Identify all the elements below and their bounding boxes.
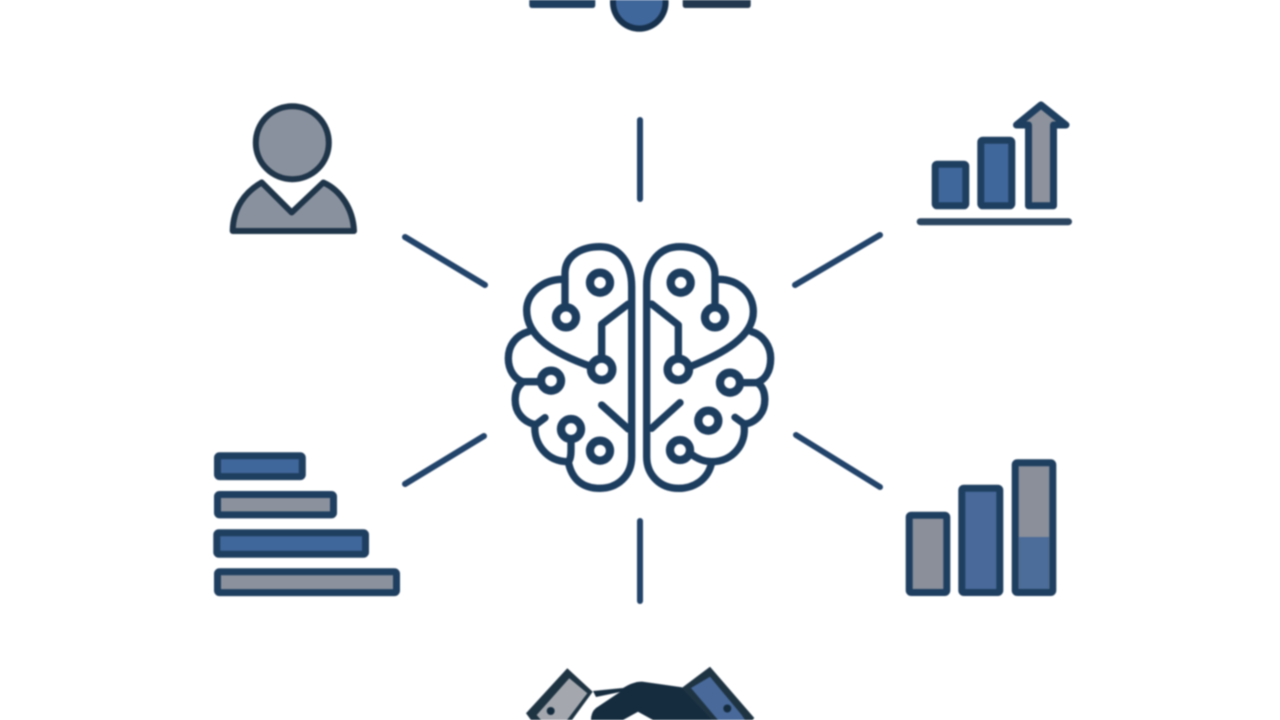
icon: person [233, 106, 354, 231]
third bar, two-tone [1015, 463, 1053, 592]
up arrow [1016, 105, 1066, 206]
brain right hemisphere [647, 247, 771, 488]
icon: cropped handshake at bottom [526, 667, 754, 720]
left cuff [526, 668, 593, 720]
icon: growth chart with arrow [917, 105, 1072, 225]
spokes radiating from the brain [405, 120, 880, 601]
brain left hemisphere [508, 247, 632, 488]
icon: central circuit brain [508, 247, 771, 488]
handshake clasp [591, 682, 736, 720]
icon: cropped node at top [529, 0, 751, 32]
right cuff [682, 667, 754, 720]
right cuff button [723, 704, 731, 712]
icon: vertical bar chart [909, 463, 1053, 592]
baseline [917, 218, 1072, 225]
icon: horizontal bar chart [217, 456, 396, 593]
left cuff button [547, 707, 555, 715]
